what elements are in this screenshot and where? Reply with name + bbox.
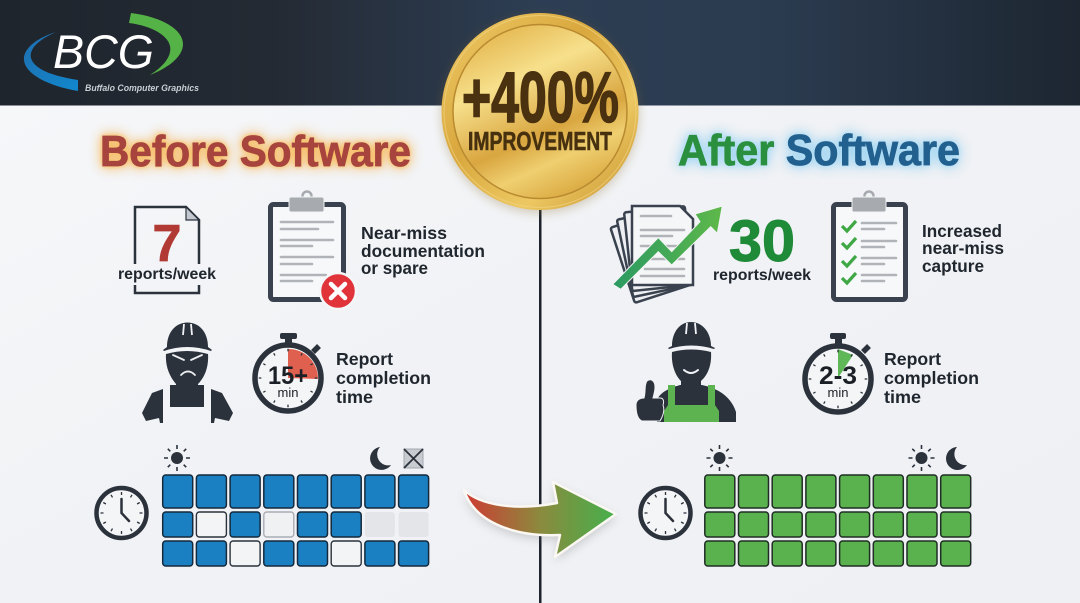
logo: BCG (24, 13, 199, 94)
logo green arc (129, 13, 183, 75)
logo blue arc (24, 32, 78, 91)
icon: stack of reports with rising arrow (610, 206, 722, 303)
heading: Before Software: Before Software (100, 127, 411, 176)
text: increased near-miss capture: Increased (922, 221, 1002, 241)
icon: sun, before (164, 445, 190, 471)
icon: single report, 7 per week (118, 207, 216, 293)
header band (0, 0, 1080, 106)
reports per week label: reports/week (118, 266, 216, 283)
text: increased near-miss capture: capture (922, 256, 984, 276)
schedule grid, after (705, 475, 971, 566)
text: report completion time, after: Report (884, 349, 941, 369)
text: near-miss documentation (361, 223, 485, 278)
logo letters: BCG (53, 25, 154, 78)
icon: clipboard with red cross (270, 192, 356, 309)
icon: clipboard with green checks (834, 192, 906, 300)
stat: 30 reports per week (713, 209, 811, 284)
schedule grid, before (163, 475, 429, 566)
icon: clock, before (96, 488, 146, 538)
thumbs-up hand (636, 380, 664, 421)
text: near-miss documentation: Near-miss (361, 223, 447, 243)
time value: 15+ (268, 362, 308, 390)
icon: sun, after right (908, 445, 934, 471)
heading: After Software: After Software (678, 126, 960, 175)
text: report completion time, after: completion (884, 368, 979, 388)
icon: crossed-out calendar (404, 449, 423, 468)
icon: unhappy worker (142, 322, 233, 423)
icon: sun, after left (706, 445, 732, 471)
gold medal badge (441, 13, 639, 213)
number 7: 7 (153, 215, 181, 273)
minutes unit: min (278, 385, 298, 400)
icon: clock, after (640, 488, 690, 538)
text: report completion time, before: time (336, 387, 373, 407)
icon: moon, after (946, 447, 967, 470)
text: report completion time, before: completion (336, 368, 431, 388)
text: report completion time, after: time (884, 387, 921, 407)
minutes unit: min (828, 385, 848, 400)
rising green arrow (613, 206, 722, 289)
text: near-miss documentation: or spare (361, 258, 428, 278)
stat: 30 reports per week: 30 (729, 209, 795, 274)
icon: moon, before (370, 447, 391, 470)
text: report completion time, before: Report (336, 349, 393, 369)
text: near-miss documentation: documentation (361, 241, 485, 261)
text: increased near-miss capture (922, 221, 1004, 276)
text: report completion time, before (336, 349, 431, 407)
badge number: +400% (462, 59, 619, 138)
icon: stopwatch 15+ min (255, 333, 321, 411)
logo tagline: Buffalo Computer Graphics (85, 83, 199, 94)
text: report completion time, after (884, 349, 979, 407)
center divider line (539, 205, 542, 603)
time value: 2-3 (819, 362, 857, 390)
icon: stopwatch 2-3 min (805, 333, 871, 412)
arrow: before to after (464, 482, 616, 561)
text: increased near-miss capture: near-miss (922, 238, 1004, 258)
badge label: IMPROVEMENT (468, 128, 612, 156)
stat: 30 reports per week: reports/week (713, 267, 811, 284)
icon: happy worker with thumbs up (636, 322, 736, 422)
